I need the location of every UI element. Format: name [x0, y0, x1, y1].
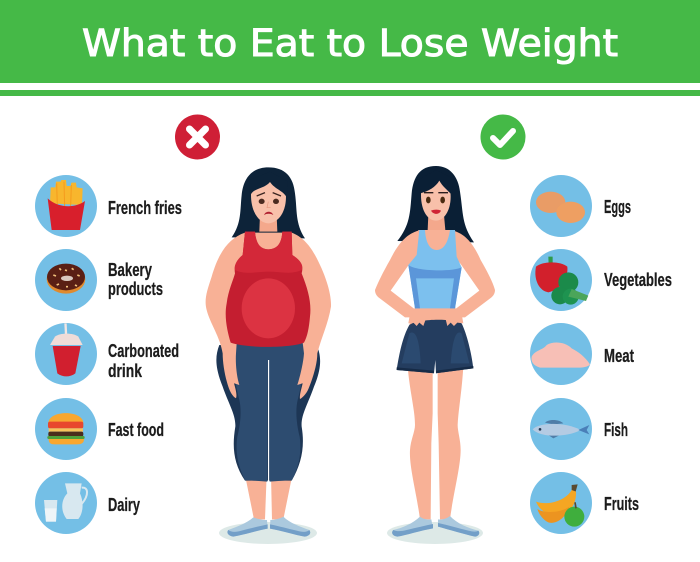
icon: green check [480, 114, 526, 160]
slim lower body [392, 367, 479, 537]
label: bakery products: products [108, 279, 163, 299]
label: fish: Fish [604, 420, 628, 440]
food item: vegetables [530, 249, 672, 311]
title: What to Eat to Lose Weight [82, 22, 618, 65]
header banner [0, 0, 700, 96]
label: carbonated drink: drink [108, 361, 143, 381]
icon: soda cup [50, 323, 83, 376]
food item: eggs [530, 175, 631, 237]
food item: bakery products [35, 249, 163, 311]
ground shadow [219, 522, 317, 544]
label: french fries: French fries [108, 198, 182, 218]
slim upper body [375, 166, 495, 373]
icon: burger [47, 413, 85, 444]
icon: french fries [48, 180, 85, 230]
label: vegetables: Vegetables [604, 270, 672, 290]
label: carbonated drink [108, 341, 179, 381]
icon: milk jug and glass [44, 483, 87, 522]
icon: eggs [536, 192, 585, 223]
food item: french fries [35, 175, 182, 237]
food item: dairy [35, 472, 140, 534]
icon: fish [533, 420, 589, 438]
ground shadow [387, 522, 483, 544]
figure: slim woman [375, 166, 495, 544]
overweight lower body [216, 342, 320, 537]
food item: fish [530, 398, 628, 460]
label: meat: Meat [604, 346, 634, 366]
label: fast food: Fast food [108, 420, 164, 440]
figure: overweight woman [206, 167, 331, 544]
food item: fruits [530, 472, 639, 534]
label: bakery products: Bakery [108, 260, 152, 280]
icon: red cross [175, 114, 220, 160]
label: fruits: Fruits [604, 494, 639, 514]
overweight upper body [206, 167, 331, 399]
label: dairy: Dairy [108, 495, 140, 515]
label: carbonated drink: Carbonated [108, 341, 179, 361]
label: bakery products [108, 260, 163, 299]
food item: carbonated drink [35, 323, 179, 385]
label: eggs: Eggs [604, 197, 631, 217]
icon: pepper and broccoli [535, 257, 588, 305]
icon: bananas and apple [536, 484, 584, 527]
food item: fast food [35, 398, 164, 460]
icon: donut [47, 264, 85, 294]
food item: meat [530, 323, 634, 385]
icon: raw meat [531, 343, 590, 368]
